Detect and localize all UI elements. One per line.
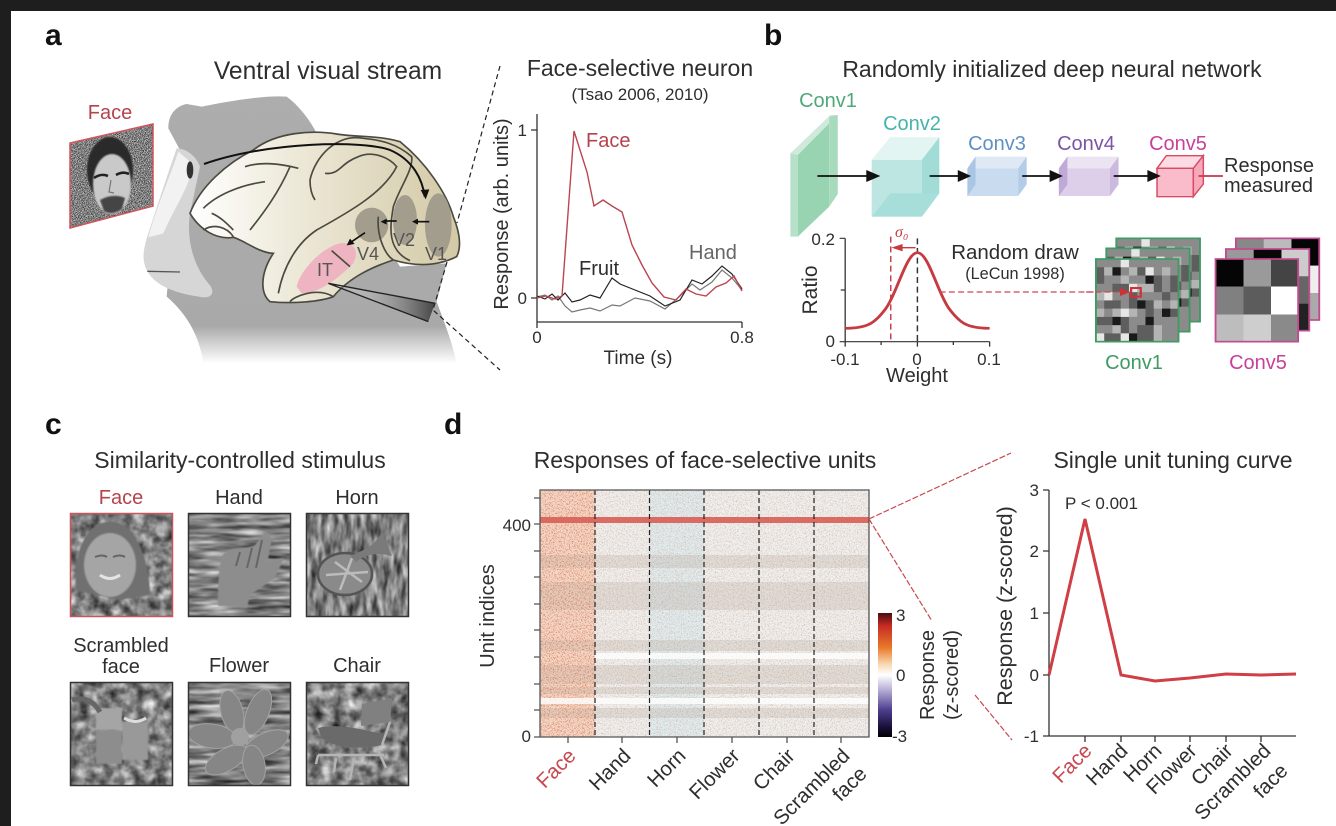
response line [1199,173,1223,178]
chart citation: (Tsao 2006, 2010) [571,85,709,104]
conv3 block [967,157,1027,196]
fruit line [537,266,742,306]
network arrows [817,170,1161,182]
visual stream arrow [204,144,425,197]
face stimulus label: Face [88,102,132,124]
category labels: face [828,762,872,806]
y ticks: 0.2 [811,230,835,249]
chair stimulus: Chair [333,655,381,677]
y tick labels: 1 [1030,604,1039,623]
category labels: Flower [1142,739,1202,799]
conv4 block [1059,157,1119,196]
category labels [532,744,872,826]
chart: face-selective neuron [491,55,754,369]
category labels: Hand [1082,739,1133,790]
colour bar: -3 [892,727,907,746]
area labels: IT [317,260,333,280]
y axis title: Response (z-scored) [993,506,1017,706]
axes [531,114,742,328]
category labels: Face [1048,739,1097,788]
colour bar [878,606,907,746]
face stimulus image [68,122,156,230]
conv4 label: Conv4 [1057,133,1115,155]
scrambled face stimulus: Scrambled [73,635,169,657]
category labels [1048,739,1293,825]
x axis zero tick: 0 [532,328,542,347]
area labels: V1 [425,244,447,264]
heatmap frame and ticks [534,490,869,743]
heading: ventral visual stream: Ventral visual stream [214,58,442,85]
colour bar title second line: (z-scored) [941,630,963,720]
category labels: Horn [643,744,691,792]
y tick 0: 0 [522,727,531,746]
conv2 label: Conv2 [883,113,941,135]
weight distribution chart [799,224,1125,387]
category labels: Face [532,744,581,793]
colour bar title: Response [917,630,939,720]
heatmap [534,490,869,743]
white gaps [540,653,869,704]
area labels [317,230,447,280]
callout lines to tuning curve [869,453,1012,740]
y zero tick: 0 [826,332,835,351]
monkey head illustration [144,96,457,363]
area V2 [393,195,417,245]
y axis ticks: 1 [518,121,527,140]
y tick labels [1024,481,1039,746]
sigma label: σ₀ [895,224,908,241]
cortical sulci [203,138,412,302]
category separators [595,490,814,737]
fruit curve label: Fruit [579,258,619,280]
area IT [297,243,356,293]
x axis title: Weight [886,365,948,387]
category labels: face [1249,759,1293,803]
y axis zero tick: 0 [518,289,527,308]
conv2 block [872,137,939,217]
horizontal response bands [540,555,869,718]
face line [537,131,742,300]
colour bar: 3 [896,606,905,625]
arrow head [421,189,429,199]
y axis title: Response (arb. units) [491,118,513,310]
network diagram blocks [790,115,1223,237]
panel letter d: d [444,408,462,441]
y tick labels: -1 [1024,727,1039,746]
face stimulus [70,487,173,617]
x tick min: -0.1 [830,350,860,369]
hand line [537,270,742,312]
random draw label: Random draw [951,241,1079,264]
y tick labels: 0 [1030,666,1039,685]
y tick 400: 400 [503,516,531,535]
chair stimulus [306,655,409,786]
x axis max tick: 0.8 [730,328,754,347]
highlighted unit [540,517,869,523]
conv1 label: Conv1 [799,90,857,112]
scrambled face stimulus: face [102,656,140,678]
hand stimulus: Hand [215,487,263,509]
response measured label: Response [1224,155,1314,177]
gaussian axes and curve [840,237,1125,347]
electrode [328,283,435,322]
x axis title: Time (s) [604,348,672,369]
grey speckle [540,490,869,737]
panel d: responses of face-selective units [444,408,1012,826]
area V4 [355,208,388,242]
chart heading: Face-selective neuron [527,55,753,81]
horn stimulus: Horn [335,487,379,509]
area labels: V2 [393,230,415,250]
panel a: ventral visual stream [45,19,500,370]
lecun citation: (LeCun 1998) [965,265,1065,283]
conv5 filter label: Conv5 [1229,352,1287,374]
area V1 [425,193,452,257]
face stimulus: Face [99,487,143,509]
panel letter b: b [764,19,782,52]
conv5 block [1157,156,1203,197]
horn stimulus [306,487,409,617]
conv3 label: Conv3 [968,133,1026,155]
conv1 filter label: Conv1 [1105,352,1163,374]
face curve label: Face [586,130,630,152]
category labels: Chair [1187,739,1238,790]
flower stimulus [187,655,292,787]
category labels: Chair [749,744,800,795]
y tick labels: 2 [1030,542,1039,561]
panel letter a: a [45,19,62,52]
heading: Randomly initialized deep neural network [842,56,1262,82]
category labels: Flower [685,744,745,804]
conv1 filters [1086,238,1200,342]
category labels: Hand [585,744,636,795]
conv1 block [790,115,838,237]
x tick max: 0.1 [977,350,1001,369]
dashed zoom lines [433,66,500,370]
category labels: Scrambled [1190,739,1276,825]
scrambled face stimulus [70,635,173,786]
panel letter c: c [45,408,62,441]
y tick labels: 3 [1030,481,1039,500]
small arrows between areas [347,219,429,245]
response measured label second line: measured [1224,175,1313,197]
hand stimulus [188,487,291,617]
chart: single unit tuning curve [993,447,1296,825]
significance label: P < 0.001 [1065,494,1138,513]
heading: Responses of face-selective units [534,447,876,473]
face column speckle [540,490,595,737]
area labels: V4 [357,244,379,264]
x tick zero: 0 [912,350,922,369]
tuning line [1049,519,1296,681]
horn column tint [649,490,704,737]
panel c: similarity-controlled stimulus [45,408,409,787]
y axis title: Ratio [799,265,822,315]
category labels: Horn [1119,739,1167,787]
chart heading: Single unit tuning curve [1053,447,1293,473]
conv5 label: Conv5 [1149,133,1207,155]
brain illustration [190,132,460,322]
axes [1043,490,1296,742]
hand curve label: Hand [689,242,737,264]
conv5 filters [1216,238,1319,342]
y axis title: Unit indices [477,564,499,668]
heading: Similarity-controlled stimulus [94,447,386,473]
colour bar: 0 [896,666,905,685]
orange speckle [540,490,869,737]
panel b: randomly initialized network [764,19,1319,387]
face column tint [540,490,595,737]
flower stimulus: Flower [209,655,269,677]
